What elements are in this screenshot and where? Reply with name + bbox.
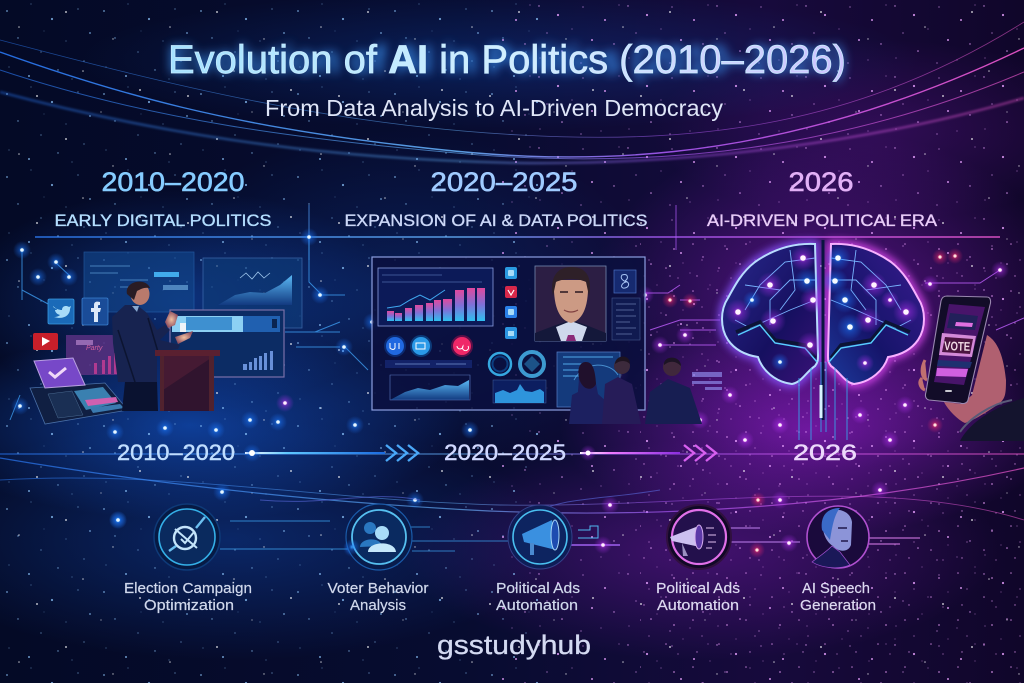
section headings bbox=[54, 167, 938, 230]
small area chart bbox=[493, 380, 546, 403]
caption bbox=[496, 581, 580, 614]
icon row connectors bbox=[109, 490, 920, 558]
heading: 2020–2025: 2020–2025 bbox=[430, 167, 578, 197]
title: Evolution of AI in Politics (2010–2026) bbox=[168, 38, 846, 82]
icon: voting machine bbox=[30, 358, 128, 424]
heading: 2010–2020: 2010–2020 bbox=[102, 167, 244, 197]
panel: area chart bbox=[203, 258, 302, 328]
caption: Optimization bbox=[144, 598, 234, 614]
label: early digital politics: EARLY DIGITAL POLITICS bbox=[54, 211, 272, 230]
arrow: blue bbox=[243, 444, 418, 462]
icon: target and dart bbox=[154, 504, 220, 570]
podium bbox=[155, 350, 220, 411]
timeline bbox=[0, 440, 1024, 465]
timeline label: 2020–2025: 2020–2025 bbox=[444, 440, 566, 465]
subtitle: From Data Analysis to AI-Driven Democracy bbox=[265, 95, 724, 121]
caption: Automation bbox=[496, 598, 578, 614]
decorative swooshes bbox=[0, 22, 1024, 520]
caption: Generation bbox=[800, 598, 876, 614]
arrow: pink bbox=[580, 445, 716, 461]
bar chart bbox=[378, 268, 493, 326]
caption: Voter Behavior bbox=[328, 581, 429, 597]
caption bbox=[800, 581, 876, 614]
heading: 2026: 2026 bbox=[788, 167, 854, 197]
icon: facebook bbox=[82, 298, 108, 325]
scene: AI-driven political era bbox=[692, 240, 1024, 441]
label: expansion of AI and data politics: EXPANSION OF AI & DATA POLITICS bbox=[344, 211, 648, 230]
scene: early digital politics bbox=[30, 252, 302, 424]
icon: blue megaphone bbox=[508, 505, 572, 569]
panel: text notes bbox=[612, 298, 640, 340]
caption bbox=[328, 581, 429, 614]
caption: Election Campaign bbox=[124, 581, 252, 597]
panel: main display bbox=[170, 310, 284, 377]
title: Evolution of AI in Politics (2010–2026) bbox=[168, 38, 846, 82]
caption: AI Speech bbox=[802, 581, 870, 597]
icon: voters bbox=[344, 504, 412, 570]
caption: Political Ads bbox=[496, 581, 580, 597]
caption: Automation bbox=[657, 598, 739, 614]
circuit lines and nodes bbox=[10, 228, 1024, 529]
panel: mini captions bbox=[692, 372, 722, 390]
panel: purple poll chart bbox=[66, 335, 120, 375]
icon: monogram tile bbox=[614, 270, 636, 293]
section rule bbox=[35, 205, 1000, 260]
icon: pink megaphone bbox=[667, 505, 731, 569]
panel: web dashboard bbox=[84, 252, 194, 312]
icon: android head bbox=[807, 506, 869, 568]
caption bbox=[124, 581, 252, 614]
feature: political ads automation blue bbox=[496, 505, 580, 614]
panel: audience screen bbox=[557, 352, 620, 407]
brain stem circuit bbox=[799, 240, 847, 440]
caption: Analysis bbox=[350, 598, 406, 614]
feature: election campaign optimization bbox=[124, 504, 252, 614]
icon: twitter bbox=[48, 299, 74, 324]
icon: youtube bbox=[33, 333, 58, 350]
icons: ring gauges bbox=[489, 352, 544, 376]
caption bbox=[656, 581, 740, 614]
portrait: candidate bbox=[535, 266, 606, 341]
icons: social app tiles bbox=[505, 267, 517, 339]
figures: audience bbox=[569, 356, 702, 424]
icon: glowing brain bbox=[722, 244, 924, 384]
line chart bbox=[385, 360, 472, 400]
icon: smartphone vote: VOTE bbox=[944, 339, 970, 354]
caption: Political Ads bbox=[656, 581, 740, 597]
brand wordmark: gsstudyhub bbox=[437, 630, 591, 660]
icons: round badges bbox=[385, 336, 472, 356]
scene: expansion of AI and data politics bbox=[372, 257, 702, 424]
feature: political ads automation pink bbox=[656, 505, 740, 614]
icon: smartphone vote bbox=[925, 296, 991, 404]
timeline label: 2010–2020: 2010–2020 bbox=[117, 440, 235, 465]
figure: speaker bbox=[112, 282, 193, 411]
brain glow bbox=[722, 244, 924, 384]
feature: voter behavior analysis bbox=[328, 504, 429, 614]
panel: command dashboard frame bbox=[372, 257, 645, 410]
panel: purple poll chart: Party bbox=[86, 345, 103, 352]
timeline label: 2026: 2026 bbox=[793, 440, 857, 465]
feature: AI speech generation bbox=[800, 506, 876, 614]
icon: hand and sleeve bbox=[920, 335, 1024, 441]
label: AI-driven political era: AI-DRIVEN POLITICAL ERA bbox=[707, 211, 938, 230]
